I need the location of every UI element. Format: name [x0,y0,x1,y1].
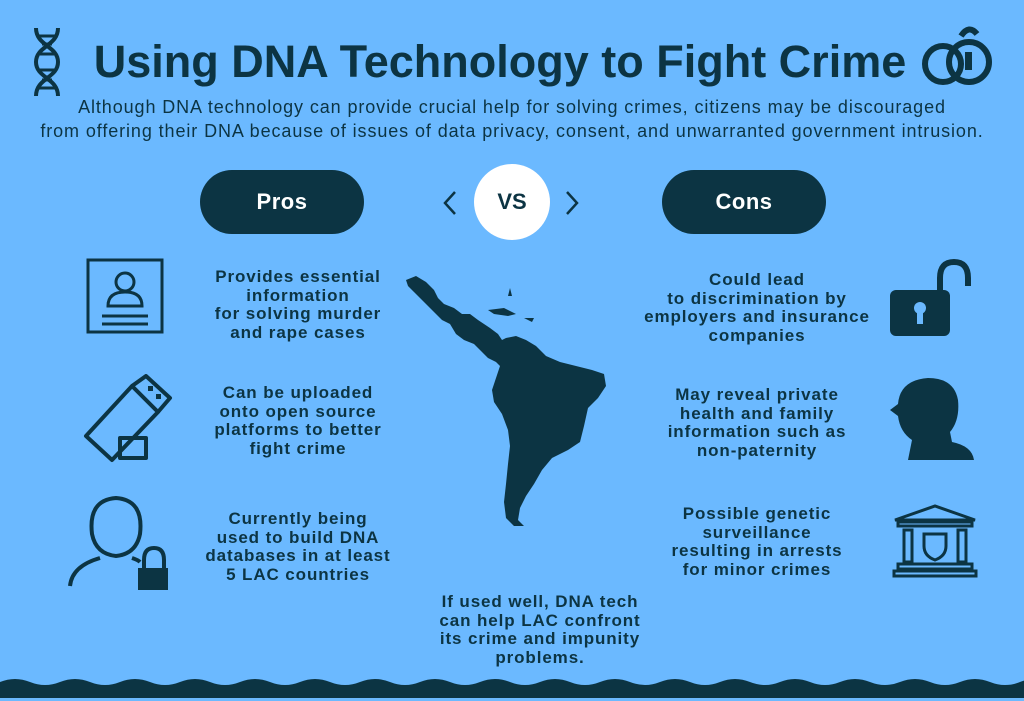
pill: Pros [200,170,364,234]
map: Latin America [406,276,606,526]
text: con 2: May reveal private [675,385,839,404]
text: pro 1: and rape cases [230,322,366,342]
subtitle: from offering their DNA because of issues of data privacy, consent, and unwarranted government intrusion. [40,121,984,141]
text: con 2: non-paternity [697,440,817,460]
text: bottom conclusion: If used well, DNA tech [442,592,638,611]
wave footer [0,679,1024,698]
title: Using DNA Technology to Fight Crime [94,36,906,87]
text: con 1: to discrimination by [667,288,847,308]
text: con 1: Could lead [709,270,805,289]
text: con 3: for minor crimes [683,560,831,578]
text: bottom conclusion [439,592,641,666]
text: pro 3 [205,509,391,584]
subtitle [40,97,984,141]
text: pro 3: 5 LAC countries [226,564,370,584]
icon: open lock [890,259,971,336]
VS circle with arrows: VS [497,189,527,214]
text: con 3 [671,504,843,578]
text: pro 2: platforms to better [214,420,382,439]
icon: USB [84,374,172,462]
icon: head silhouette [890,378,974,460]
text: pro 3: used to build DNA [217,528,379,546]
text: pro 1: for solving murder [215,304,381,323]
text: con 1: employers and insurance [644,307,870,326]
icon: handcuffs [922,26,992,85]
text: pro 2: onto open source [219,402,376,420]
subtitle: Although DNA technology can provide crucial help for solving crimes, citizens may be discouraged [78,97,946,117]
text: pro 3: Currently being [228,509,368,528]
text: pro 3: databases in at least [205,546,391,565]
icon: person with lock [68,496,168,590]
icon: courthouse [892,504,978,578]
text: bottom conclusion: can help LAC confront [439,610,641,630]
text: con 3: Possible genetic [683,504,831,523]
icon: ID card [86,258,164,334]
icon: DNA [34,28,60,96]
text: con 3: resulting in arrests [671,541,843,560]
text: pro 2: fight crime [250,438,346,458]
text: con 3: surveillance [702,522,812,542]
text: con 1 [644,270,870,344]
text: con 2: information such as [668,422,846,441]
VS circle with arrows [443,164,579,240]
pill: Cons [662,170,826,234]
text: pro 1 [215,267,381,342]
pill: Pros: Pros [257,189,307,214]
text: con 1: companies [709,326,805,344]
text: pro 2 [214,383,382,458]
text: pro 1: information [246,286,350,304]
text: bottom conclusion: problems. [495,648,585,666]
text: bottom conclusion: its crime and impunity [440,629,640,648]
text: pro 2: Can be uploaded [223,383,373,402]
text: con 2: health and family [680,404,834,422]
text: pro 1: Provides essential [215,267,381,286]
pill: Cons: Cons [716,189,772,214]
text: con 2 [668,385,846,460]
